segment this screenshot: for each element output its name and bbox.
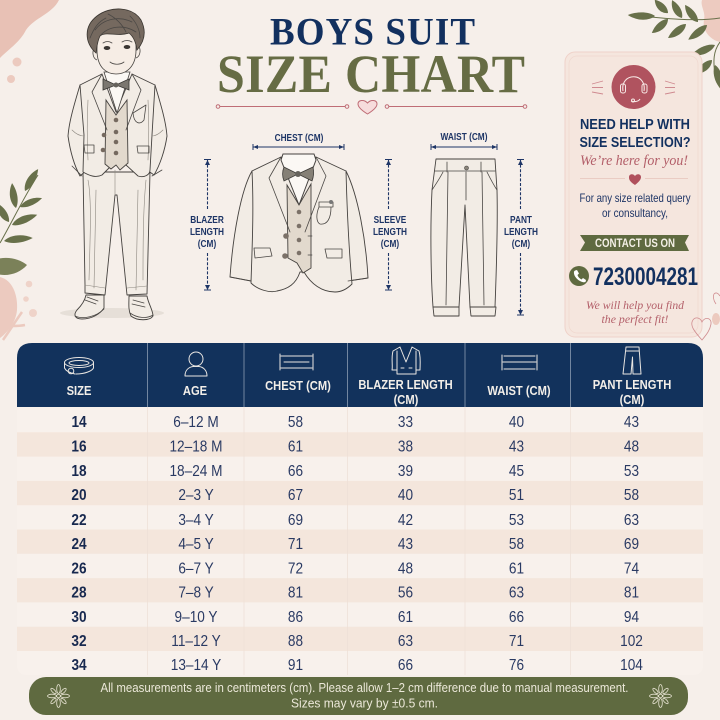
sleeves [68,85,90,176]
lapels, pockets [92,74,141,130]
table values: 66 [288,463,303,480]
header: waist: WAIST (CM) [487,383,551,398]
table values: 94 [624,609,639,626]
table: size chart [17,343,703,675]
heading: size chart: SIZE CHART [217,46,525,104]
measurement: pant length: (CM) [512,238,530,250]
header: blazer length [358,347,453,407]
measurement: chest arrow and label: CHEST (CM) [275,132,323,144]
table values: 56 [398,585,413,602]
table values: 86 [288,609,303,626]
table values: 63 [398,633,413,650]
measurement: sleeve length: LENGTH [373,226,407,238]
table values: 58 [288,414,303,431]
table values: 43 [624,414,639,431]
table values: 61 [509,561,524,578]
table values: 16 [71,439,87,456]
decoration: bottom-left blob and sprig [0,277,37,340]
table values: 12–18 M [169,439,223,456]
body [251,157,352,292]
icon: right flower ornament [650,684,672,708]
table values: 32 [71,633,87,650]
measurement: pant length: LENGTH [504,226,538,238]
table values: 33 [398,414,413,431]
table values: 81 [288,585,303,602]
table values: 40 [398,487,413,504]
measurement: blazer length: BLAZER [190,214,224,226]
table values: 102 [620,633,643,650]
table values: 88 [288,633,303,650]
heading: boys suit: BOYS SUIT [270,10,475,54]
table values: 72 [288,561,303,578]
help description: or consultancy, [602,206,668,220]
jacket body [80,74,155,177]
table values: 9–10 Y [175,609,218,626]
table values: 18 [71,463,87,480]
table values: 3–4 Y [178,512,214,529]
table values: 11–12 Y [171,633,221,650]
table values: 58 [509,536,524,553]
bow tie [103,79,129,90]
contact ribbon: CONTACT US ON [595,236,675,250]
shoes [75,295,104,319]
header: age [183,352,207,398]
measurement: pant length [504,160,538,315]
decoration: top-left pink blob and dots [0,0,59,83]
measurement: sleeve length [373,160,407,290]
help description: For any size related query [580,191,690,205]
illustration: trousers [431,159,497,316]
table values: 61 [288,439,303,456]
table values: 26 [71,561,87,578]
head [97,30,136,74]
table values: 45 [509,463,524,480]
table values: 28 [71,585,87,602]
table values: 42 [398,512,413,529]
bow tie [282,167,314,181]
table values [71,414,643,674]
table values: 74 [624,561,639,578]
table values: 4–5 Y [178,536,214,553]
header: age: AGE [183,383,207,398]
table values: 61 [398,609,413,626]
footer text: Sizes may vary by ±0.5 cm. [291,696,438,710]
table values: 39 [398,463,413,480]
table values: 30 [71,609,87,626]
table values: 14 [71,414,87,431]
help tagline: We’re here for you! [580,153,688,169]
header: blazer length: BLAZER LENGTH [358,377,453,392]
illustration: blazer [230,154,368,292]
decoration: top-right leaves and blob [628,0,720,89]
header: blazer length: (CM) [394,392,418,407]
header: chest: CHEST (CM) [265,378,331,393]
footer text: All measurements are in centimeters (cm). Please allow 1–2 cm difference due to manual measurement. [100,681,628,695]
table values: 43 [398,536,413,553]
vest [105,100,128,170]
panel: help card [565,52,702,337]
illustration: boy in suit [60,9,167,320]
table values: 38 [398,439,413,456]
decoration: left leaf branch [0,167,43,275]
table values: 22 [71,512,87,529]
table values: 43 [509,439,524,456]
help heading: NEED HELP WITH [580,116,690,133]
heart divider [580,174,688,185]
measurement: blazer length: LENGTH [190,226,224,238]
help description [580,191,690,220]
table values: 6–12 M [173,414,219,431]
table values: 63 [509,585,524,602]
help closing note [586,298,685,326]
table values: 6–7 Y [178,561,214,578]
measurement: chest arrow and label [253,132,344,150]
measurement: blazer length: (CM) [198,238,216,250]
table values: 51 [509,487,524,504]
table values: 20 [71,487,87,504]
shirt [104,72,130,113]
table values: 91 [288,657,303,674]
table values: 53 [509,512,524,529]
table values: 48 [624,439,639,456]
measurement: waist arrow and label: WAIST (CM) [441,131,487,143]
footer note [29,677,688,715]
header: waist [487,355,551,398]
title [216,10,527,114]
help heading [580,116,690,151]
lapels, pockets, chain [269,157,326,232]
table values: 13–14 Y [171,657,222,674]
header: pant length: PANT LENGTH [593,377,671,392]
table values: 66 [398,657,413,674]
table values: 53 [624,463,639,480]
footer text [100,681,628,710]
table values: 69 [288,512,303,529]
table values: 58 [624,487,639,504]
table header [17,343,703,407]
help closing note: the perfect fit! [602,312,668,326]
table values: 34 [71,657,87,674]
measurement: waist arrow and label [431,131,497,150]
sleeves [230,171,262,281]
header: chest [265,354,331,393]
shirt [281,154,316,205]
icon: left flower ornament [48,684,70,708]
table values: 40 [509,414,524,431]
header: size [64,358,94,398]
measurement: sleeve length: (CM) [381,238,399,250]
table values: 67 [288,487,303,504]
table values: 7–8 Y [178,585,214,602]
help heading: SIZE SELECTION? [580,134,690,151]
table values: 63 [624,512,639,529]
table values: 71 [509,633,524,650]
table values: 76 [509,657,524,674]
measurement: pant length: PANT [510,214,532,226]
table values: 66 [509,609,524,626]
table values: 69 [624,536,639,553]
vest [287,184,311,273]
header: pant length: (CM) [620,392,644,407]
table values: 2–3 Y [178,487,214,504]
table values: 48 [398,561,413,578]
decoration: bottom-right hearts [692,293,720,340]
table values: 18–24 M [169,463,223,480]
header: pant length [593,347,671,407]
header: size: SIZE [67,383,91,398]
table values: 24 [71,536,87,553]
measurement: blazer length [190,160,224,290]
phone number [569,263,698,291]
table values: 81 [624,585,639,602]
title divider with heart [216,100,527,114]
table body rows [17,407,703,675]
table values: 71 [288,536,303,553]
table values: 104 [620,657,643,674]
measurement: sleeve length: SLEEVE [374,214,406,226]
trousers [83,172,150,295]
icon: headset [592,65,675,109]
help closing note: We will help you find [586,298,685,312]
